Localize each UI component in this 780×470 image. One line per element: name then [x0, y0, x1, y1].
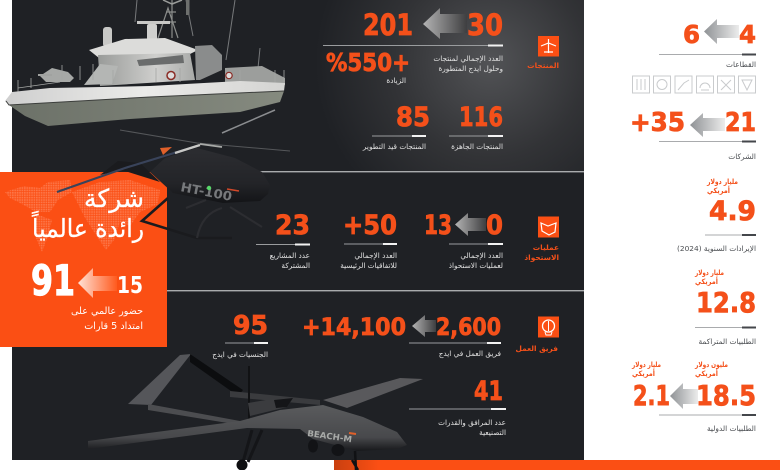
stat: increase: الزيادة: [386, 76, 406, 85]
stat: accumulated orders: مليار دولار: [694, 268, 724, 277]
stat: companies: 21: [725, 108, 756, 138]
stat: agreements: للاتفاقيات الرئيسية: [340, 261, 397, 270]
stat: nationalities: الجنسيات في ايدج: [212, 350, 268, 359]
stat: annual revenue: مليار دولار: [706, 177, 738, 186]
description: [71, 306, 143, 332]
stat: sectors: 4: [739, 20, 756, 49]
heading: رائدة عالمياً: [31, 211, 144, 243]
icon: team: [538, 316, 559, 338]
stat: accumulated orders: الطلبيات المتراكمة: [698, 337, 756, 346]
description: امتداد 5 قارات: [84, 321, 143, 332]
heading: شركة: [84, 184, 144, 213]
stat: total products: وحلول ايدج المتطورة: [438, 64, 503, 73]
stat: agreements: [340, 210, 397, 270]
stat: joint projects: 23: [275, 210, 310, 241]
label: products: المنتجات: [527, 61, 559, 70]
stat: facilities: عدد المرافق والقدرات: [438, 418, 506, 427]
stat: products in development: المنتجات قيد التطوير: [362, 142, 426, 151]
column: corporate figures: [630, 19, 756, 433]
stat: increase: [326, 48, 410, 85]
stat: total products: 30: [467, 8, 503, 42]
label: acquisitions: [524, 243, 559, 262]
stat: annual revenue: [677, 177, 756, 253]
stat: sectors: [659, 19, 756, 69]
illustration: patrol boat: [5, 0, 285, 126]
stat: agreements: العدد الإجمالي: [354, 251, 397, 260]
stat: annual revenue: 4.9: [709, 196, 756, 227]
stat: countries: 91: [31, 256, 75, 305]
illustration: HT-100 helicopter: HT-100: [179, 179, 234, 204]
stat: countries: 15: [117, 273, 143, 299]
illustration: BEACH-M drone: [88, 354, 423, 470]
footer orange bar: [334, 460, 780, 470]
stat: international orders: مليون دولار: [694, 360, 728, 369]
stat: total products: 201: [363, 8, 413, 42]
section: acquisitions: [256, 210, 559, 270]
label: workforce: فريق العمل: [516, 344, 558, 353]
stat: team size: [302, 313, 501, 358]
stat: countries: [31, 256, 143, 305]
heading: [31, 184, 144, 243]
stat: sectors: 6: [683, 20, 700, 49]
stat: joint projects: المشتركة: [281, 261, 310, 270]
icon: handshake: [538, 216, 559, 238]
stat: facilities: التصنيعية: [479, 428, 506, 437]
stat: total products: [323, 8, 503, 73]
panel: dark background: [12, 0, 584, 460]
stat: international orders: مليار دولار: [631, 360, 661, 369]
description: حضور عالمي على: [71, 306, 143, 317]
stat: team size: فريق العمل في ايدج: [439, 349, 501, 358]
stat: accumulated orders: أمريكي: [695, 276, 718, 286]
stat: companies: [630, 108, 756, 161]
stat: agreements: +50: [343, 210, 397, 241]
stat: companies: +35: [630, 108, 685, 138]
section: products: [323, 8, 559, 151]
stat: annual revenue: أمريكي: [707, 185, 730, 195]
stat: international orders: أمريكي: [632, 368, 655, 378]
illustration: BEACH-M drone: BEACH-M: [307, 429, 353, 445]
stat: acquisitions count: العدد الإجمالي: [460, 251, 503, 260]
world map: [5, 180, 160, 252]
stat: joint projects: عدد المشاريع: [270, 251, 310, 260]
stat: increase: %550+: [326, 48, 410, 77]
illustration: HT-100 helicopter: [57, 110, 290, 238]
stat: team size: +14,100: [302, 313, 406, 341]
stat: companies: الشركات: [728, 152, 756, 161]
panel: global leader: [0, 172, 167, 347]
stat: team size: 2,600: [436, 313, 501, 341]
stat: ready products: 116: [459, 102, 503, 133]
stat: international orders: [631, 360, 756, 433]
stat: products in development: [362, 102, 430, 151]
stat: acquisitions count: 0: [486, 210, 503, 241]
stat: international orders: 18.5: [696, 379, 756, 412]
label: acquisitions: عمليات: [533, 243, 559, 252]
icons: sectors: [632, 76, 756, 93]
icon: products: [538, 36, 559, 56]
stat: joint projects: [256, 210, 310, 270]
label: acquisitions: الاستحواذ: [524, 253, 559, 262]
stat: international orders: الطلبيات الدولية: [707, 424, 756, 433]
stat: nationalities: [212, 311, 268, 359]
stat: ready products: المنتجات الجاهزة: [451, 142, 503, 151]
stat: facilities: 41: [474, 376, 503, 407]
stat: acquisitions count: 13: [424, 210, 452, 241]
stat: sectors: القطاعات: [726, 60, 756, 69]
section: workforce: [212, 311, 559, 437]
stat: acquisitions count: [424, 210, 503, 270]
stat: accumulated orders: [694, 268, 756, 346]
stat: products in development: 85: [396, 102, 430, 133]
stat: annual revenue: الإيرادات السنوية (2024): [677, 244, 756, 253]
stat: accumulated orders: 12.8: [696, 286, 756, 319]
stat: ready products: [449, 102, 503, 151]
stat: nationalities: 95: [233, 311, 268, 341]
stat: international orders: أمريكي: [695, 368, 718, 378]
stat: total products: العدد الإجمالي لمنتجات: [433, 54, 503, 63]
stat: international orders: 2.1: [633, 379, 670, 412]
stat: facilities: [409, 376, 506, 437]
stat: acquisitions count: لعمليات الاستحواذ: [449, 261, 503, 270]
